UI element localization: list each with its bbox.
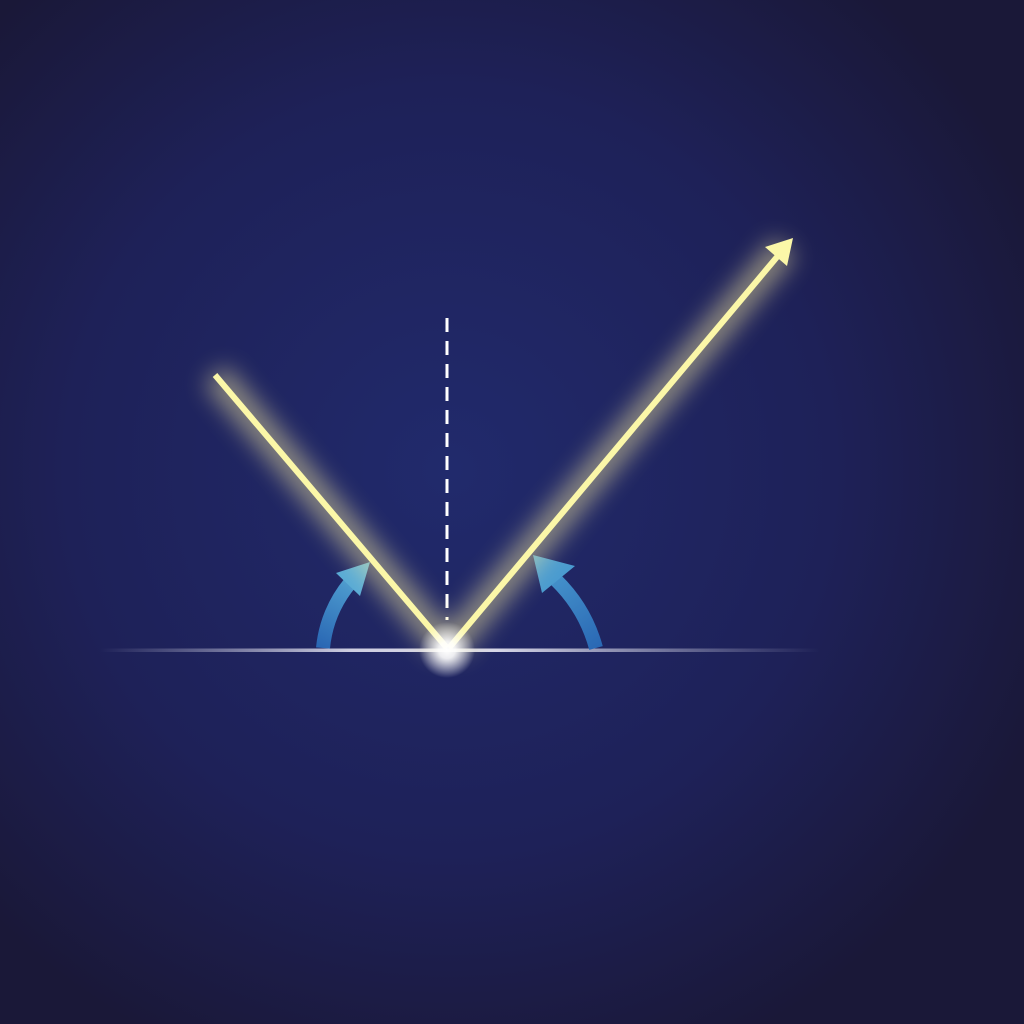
reflected ray with arrow: [449, 238, 793, 648]
surface line: [100, 648, 820, 652]
arc: angle of incidence: [323, 562, 370, 648]
dashed normal line: [446, 318, 448, 620]
reflection point glow: [419, 622, 475, 678]
incident ray: [215, 375, 447, 648]
arc: angle of reflection: [533, 555, 596, 648]
